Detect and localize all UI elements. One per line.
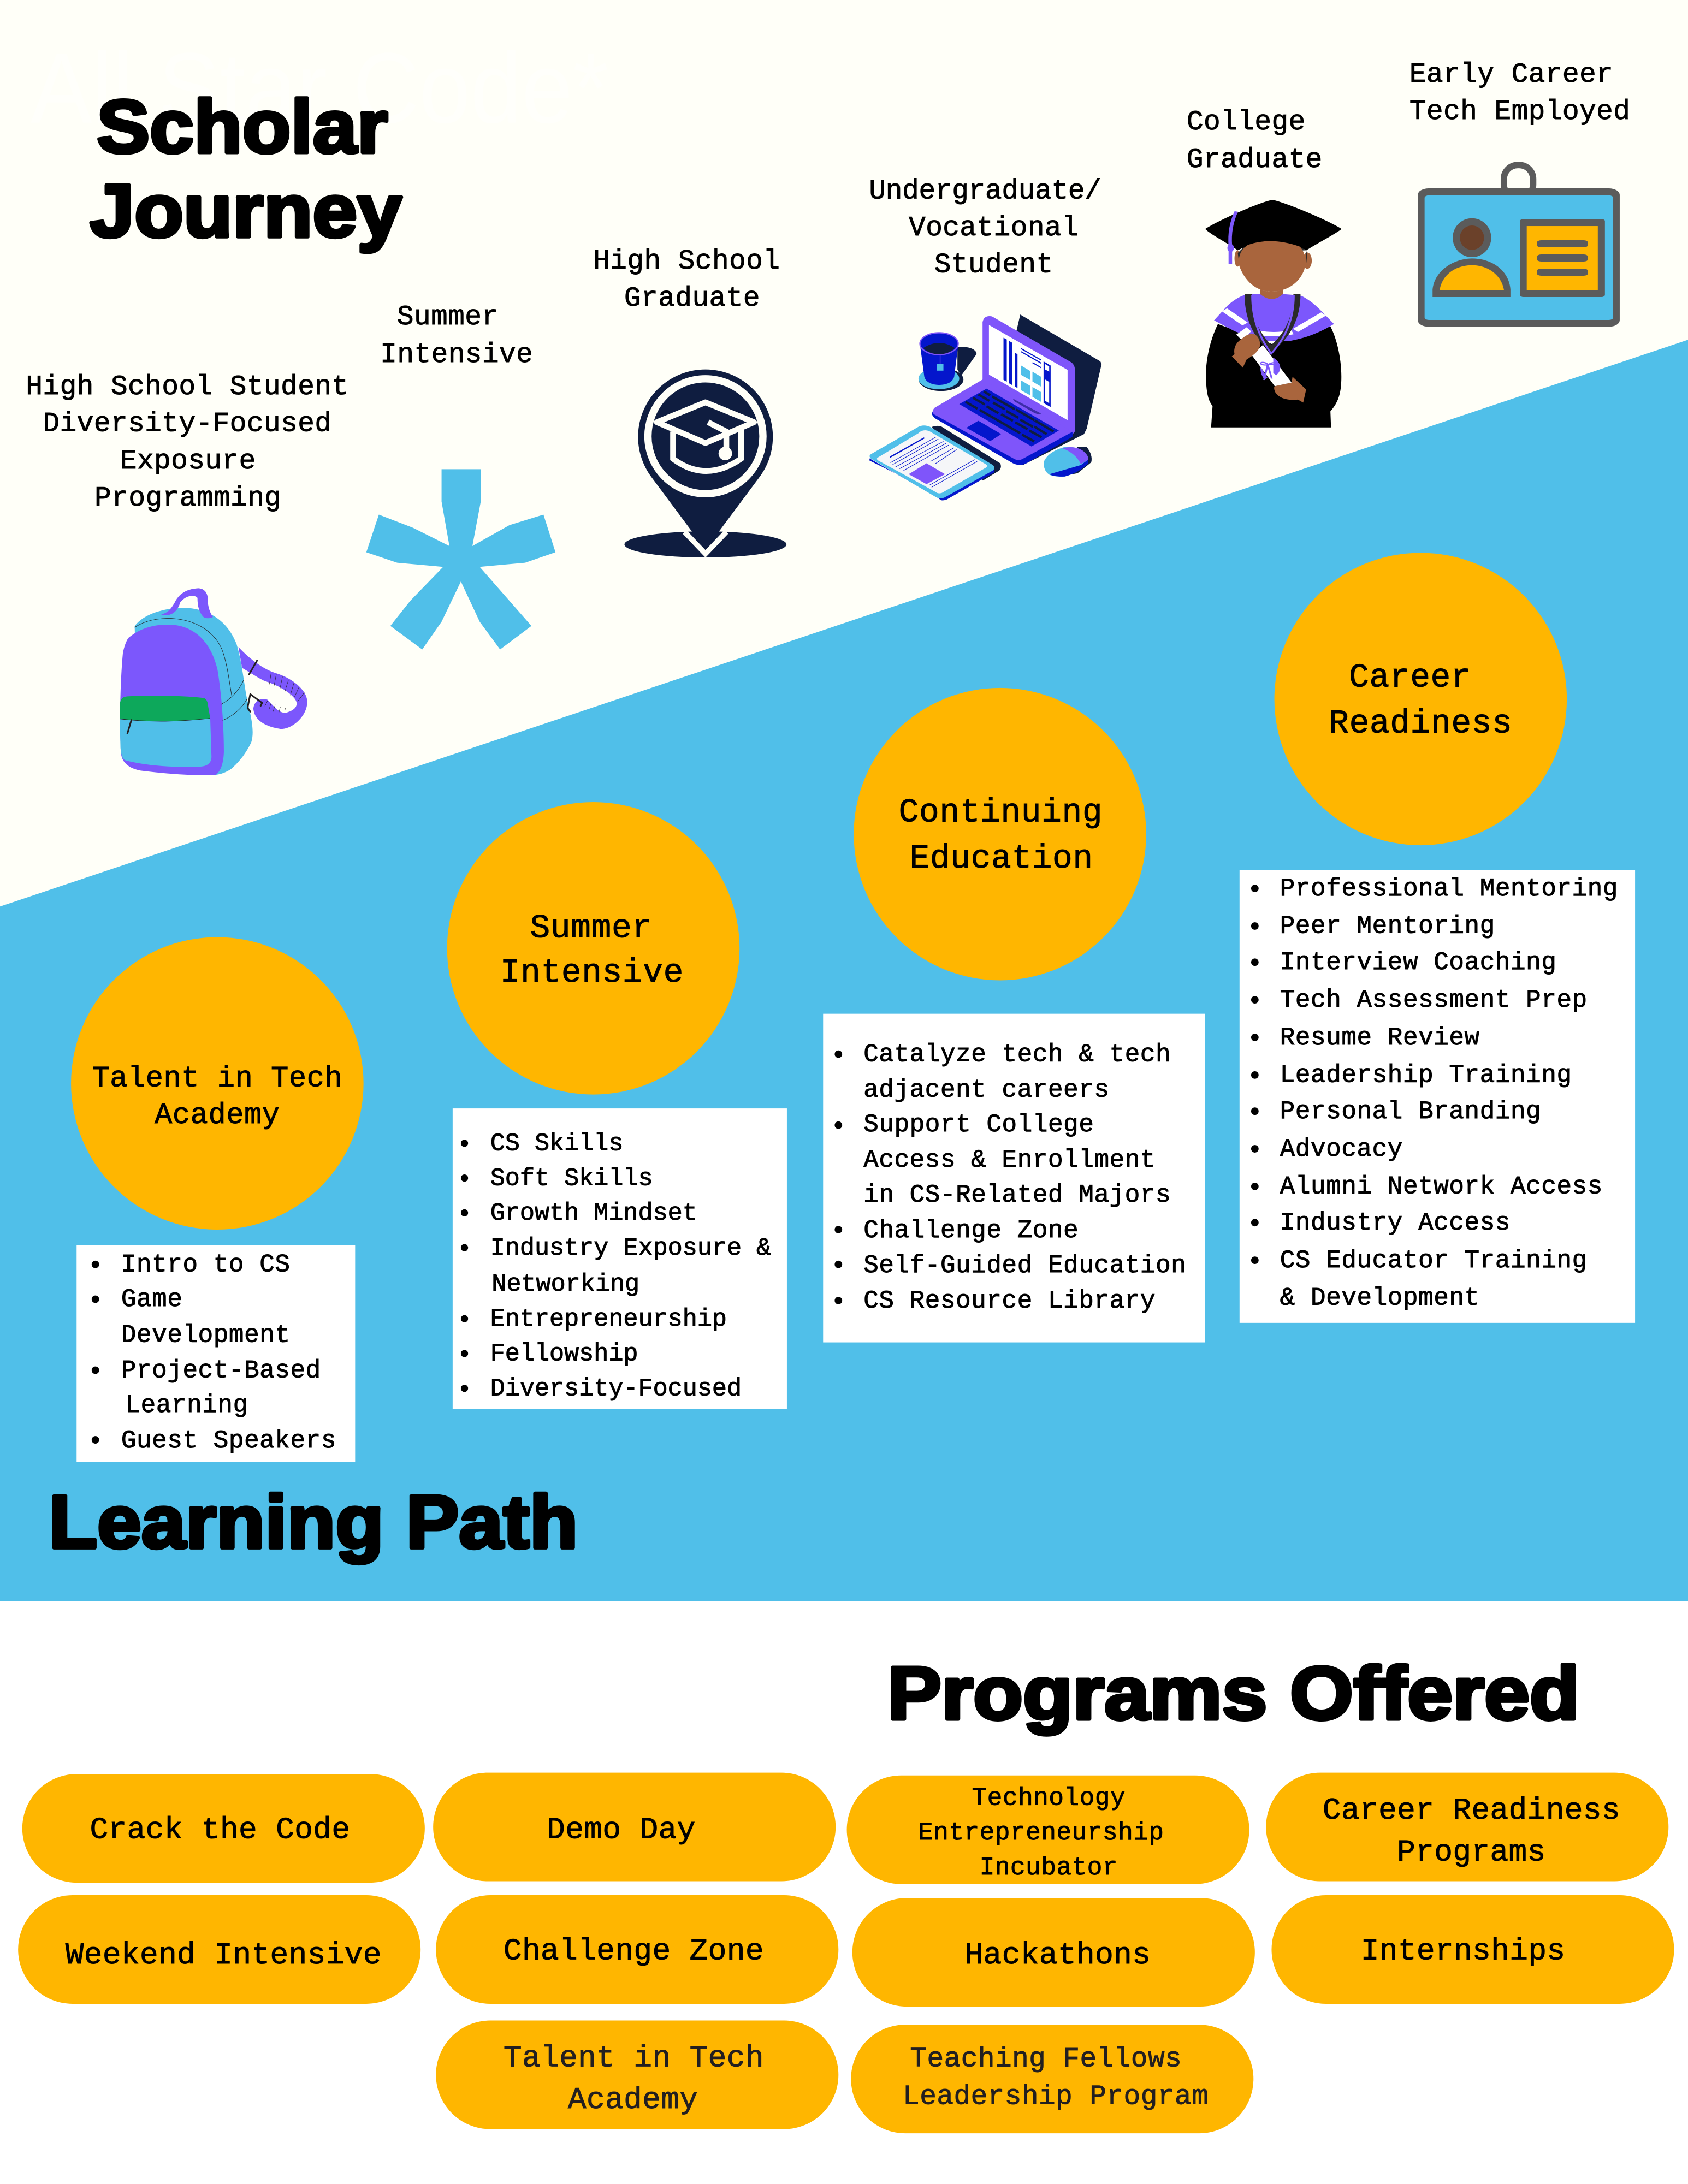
- pill: Hackathons: Hackathons: [965, 1938, 1151, 1973]
- stage label: Undergraduate: Student: [934, 250, 1053, 281]
- list box: Summer Intensive: Growth Mindset: [490, 1199, 697, 1227]
- stage label: Undergraduate: [869, 176, 1101, 281]
- list box: Talent in Tech Academy: Game: [121, 1285, 182, 1314]
- list box: Summer Intensive: Entrepreneurship: [490, 1305, 727, 1333]
- list box: Talent in Tech Academy: Learning: [126, 1391, 248, 1420]
- title: Scholar Journey: Journey: [90, 169, 402, 253]
- list box: Continuing Education: Challenge Zone: [863, 1216, 1079, 1245]
- background: cream top section: [0, 0, 1688, 1603]
- background: white bottom section: [0, 1601, 1688, 2184]
- circle: Continuing Education: Education: [910, 840, 1093, 878]
- pill: Demo Day: Demo Day: [547, 1812, 696, 1847]
- stage label: High School Student: [26, 372, 349, 514]
- pill: Demo Day: [433, 1773, 836, 1882]
- list box: Talent in Tech Academy: Project-Based: [121, 1356, 321, 1385]
- stage label: High School Student: Diversity-Focused: [43, 409, 332, 440]
- list box: Career Readiness: Advocacy: [1280, 1135, 1403, 1164]
- icon: asterisk: [366, 469, 555, 649]
- stage label: High School Graduate: Graduate: [624, 283, 760, 314]
- stage label: High School Student: Programming: [94, 483, 281, 514]
- pill: Internships: Internships: [1361, 1933, 1566, 1968]
- list box: Continuing Education: Catalyze tech & tech: [863, 1040, 1171, 1069]
- pill: Career Readiness Programs: [1266, 1773, 1668, 1882]
- list box: Career Readiness: Personal Branding: [1280, 1097, 1541, 1126]
- pill: Technology Entrepreneurship Incubator: Incubator: [980, 1854, 1118, 1882]
- list box: Summer Intensive: Diversity-Focused: [490, 1374, 742, 1403]
- list box: Career Readiness: Leadership Training: [1280, 1061, 1572, 1090]
- list box: Continuing Education: Self-Guided Education: [863, 1251, 1186, 1280]
- pill: Weekend Intensive: [18, 1895, 420, 2004]
- list box: Career Readiness: Peer Mentoring: [1280, 912, 1495, 941]
- pill: Technology Entrepreneurship Incubator: Entrepreneurship: [918, 1819, 1164, 1847]
- stage label: Summer Intensive: [380, 302, 533, 371]
- pill: Teaching Fellows Leadership Program: Teaching Fellows: [910, 2044, 1182, 2075]
- list box: Continuing Education: in CS-Related Majors: [863, 1181, 1171, 1209]
- circle: Continuing Education: [854, 688, 1146, 980]
- circle: Continuing Education: Continuing: [899, 794, 1103, 832]
- stage label: High School Graduate: [593, 246, 780, 314]
- list box: Continuing Education: [823, 1014, 1205, 1343]
- list box: Talent in Tech Academy: Intro to CS: [121, 1250, 291, 1279]
- icon: laptop with tablet, cup and mouse: [869, 314, 1101, 500]
- pill: Weekend Intensive: Weekend Intensive: [66, 1938, 382, 1973]
- circle: Career Readiness: [1275, 553, 1567, 845]
- list box: Talent in Tech Academy: [76, 1245, 355, 1462]
- list box: Career Readiness: CS Educator Training: [1280, 1247, 1588, 1275]
- list box: Career Readiness: Alumni Network Access: [1280, 1173, 1603, 1201]
- circle: Talent in Tech Academy: Talent in Tech: [92, 1062, 342, 1095]
- stage label: Summer Intensive: Summer: [397, 302, 499, 333]
- pill: Hackathons: [852, 1898, 1255, 2007]
- pill: Teaching Fellows Leadership Program: Leadership Program: [903, 2082, 1209, 2113]
- list box: Continuing Education: adjacent careers: [863, 1076, 1110, 1104]
- pill: Internships: [1271, 1895, 1674, 2004]
- circle: Summer Intensive: [447, 802, 739, 1095]
- icon: ID badge clip: [1504, 165, 1533, 198]
- pill: Crack the Code: Crack the Code: [90, 1812, 350, 1847]
- heading: Learning Path: Learning Path: [49, 1480, 578, 1564]
- pill: Crack the Code: [22, 1774, 425, 1883]
- circle: Career Readiness: Career: [1349, 659, 1471, 697]
- icon: graduation map pin: [624, 370, 786, 557]
- icon: graduate: [1205, 200, 1342, 428]
- circle: Talent in Tech Academy: [71, 937, 364, 1230]
- pill: Career Readiness Programs: Programs: [1397, 1835, 1546, 1870]
- pill: Technology Entrepreneurship Incubator: Technology: [972, 1784, 1126, 1812]
- list box: Summer Intensive: Industry Exposure &: [490, 1234, 771, 1262]
- stage label: College Graduate: [1187, 107, 1323, 176]
- title: Scholar Journey: Scholar: [97, 85, 388, 169]
- heading: Programs Offered: Programs Offered: [887, 1651, 1579, 1735]
- pill: Challenge Zone: Challenge Zone: [504, 1933, 764, 1968]
- list box: Career Readiness: [1240, 870, 1635, 1323]
- list box: Career Readiness: Resume Review: [1280, 1024, 1480, 1052]
- circle: Summer Intensive: Intensive: [500, 954, 684, 992]
- stage label: Early Career: Early Career: [1409, 60, 1613, 91]
- list box: Career Readiness: Professional Mentoring: [1280, 875, 1618, 903]
- list box: Career Readiness: Industry Access: [1280, 1209, 1511, 1237]
- list box: Talent in Tech Academy: Guest Speakers: [121, 1427, 336, 1455]
- pill: Talent in Tech Academy: Talent in Tech: [504, 2041, 764, 2076]
- list box: Career Readiness: Interview Coaching: [1280, 948, 1556, 977]
- list box: Summer Intensive: CS Skills: [490, 1130, 623, 1158]
- stage label: Early Career: [1409, 60, 1630, 128]
- icon: backpack: [120, 588, 307, 775]
- list box: Career Readiness: & Development: [1280, 1284, 1480, 1313]
- background: blue diagonal panel: [0, 340, 1688, 1601]
- stage label: Undergraduate: Vocational: [909, 213, 1079, 244]
- stage label: High School Student: Exposure: [120, 446, 256, 477]
- faint ghost brand text: All Star Code*: [31, 32, 608, 144]
- stage label: College Graduate: Graduate: [1187, 145, 1323, 176]
- list box: Career Readiness: Tech Assessment Prep: [1280, 986, 1588, 1014]
- list box: Summer Intensive: [453, 1108, 787, 1409]
- pill: Talent in Tech Academy: [436, 2021, 838, 2129]
- pill: Technology Entrepreneurship Incubator: [847, 1776, 1249, 1884]
- list box: Continuing Education: Access & Enrollment: [863, 1146, 1156, 1174]
- list box: Continuing Education: CS Resource Library: [863, 1287, 1156, 1315]
- stage label: Summer Intensive: Intensive: [380, 340, 533, 371]
- pill: Talent in Tech Academy: Academy: [568, 2082, 698, 2117]
- pill: Teaching Fellows Leadership Program: [851, 2025, 1253, 2133]
- circle: Summer Intensive: Summer: [530, 910, 653, 947]
- list box: Summer Intensive: Networking: [491, 1270, 639, 1298]
- stage label: High School Graduate: High School: [593, 246, 780, 277]
- list box: Summer Intensive: Soft Skills: [490, 1164, 653, 1192]
- list box: Summer Intensive: Fellowship: [490, 1340, 638, 1368]
- list box: Continuing Education: Support College: [863, 1111, 1094, 1139]
- circle: Talent in Tech Academy: Academy: [155, 1099, 280, 1132]
- list box: Talent in Tech Academy: Development: [121, 1321, 291, 1349]
- stage label: Early Career: Tech Employed: [1409, 97, 1630, 128]
- stage label: College Graduate: College: [1187, 107, 1306, 138]
- circle: Career Readiness: Readiness: [1329, 705, 1512, 743]
- title: Scholar Journey: [90, 85, 402, 253]
- icon: ID badge: [1418, 188, 1620, 327]
- stage label: High School Student: High School Student: [26, 372, 349, 403]
- pill: Challenge Zone: [436, 1895, 838, 2004]
- pill: Career Readiness Programs: Career Readiness: [1323, 1793, 1620, 1828]
- stage label: Undergraduate: Undergraduate/: [869, 176, 1101, 207]
